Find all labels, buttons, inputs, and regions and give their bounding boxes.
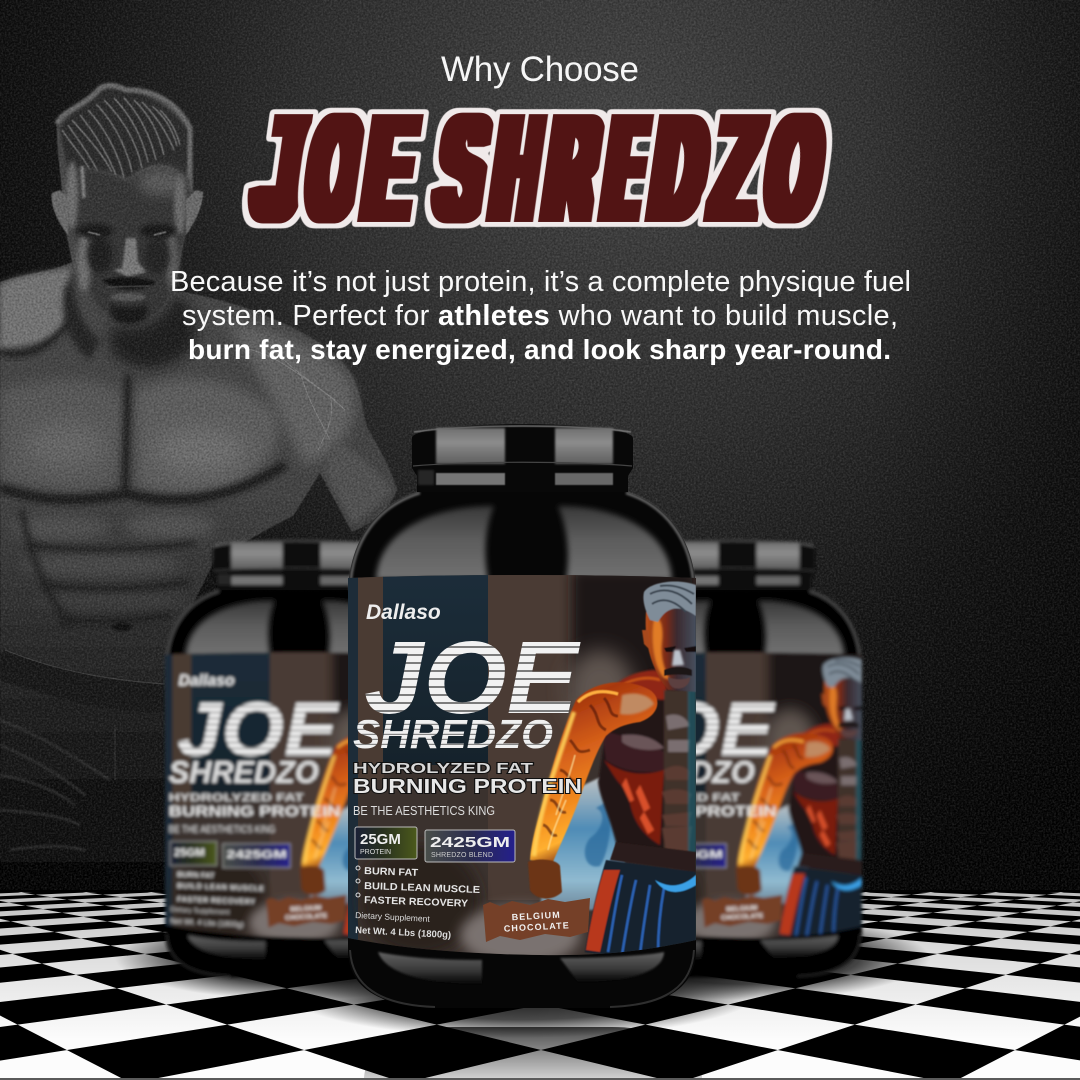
title: JOE SHREDZO: O xyxy=(759,85,831,251)
product jar: left, blurred: 2425GM xyxy=(226,849,286,861)
label: brand: Dallaso xyxy=(366,601,441,624)
heading: Why Choose: Why Choose xyxy=(441,50,639,89)
badge: 2425GM blend xyxy=(425,830,515,862)
product jar: left, blurred: JOE xyxy=(177,687,340,773)
title: JOE SHREDZO: O xyxy=(300,85,370,251)
label: JOE wordmark: JOE xyxy=(364,620,581,735)
badge: 25GM protein: 25GM xyxy=(360,831,401,848)
product jar: right, blurred: BELGIUM xyxy=(726,905,758,913)
text block: why it matters: burn fat, stay energized, and look sharp year-round. xyxy=(188,334,891,365)
label: product name xyxy=(353,760,582,798)
product jar: right, blurred: BURNING PROTEIN xyxy=(605,803,776,820)
label: net weight: Net Wt. 4 Lbs (1800g) xyxy=(355,925,451,941)
product jar: left, blurred: SHREDZO xyxy=(169,754,319,789)
label: product name: HYDROLYZED FAT xyxy=(353,760,533,777)
product jar: right, blurred xyxy=(601,539,862,977)
product jar: right, blurred: CHOCOLATE xyxy=(721,913,764,922)
badge: 25GM protein xyxy=(355,827,417,859)
label: benefit list: BURN FAT xyxy=(364,866,418,879)
product jar: left, blurred: Dietary Supplement xyxy=(170,906,230,916)
product jar: left, blurred: Dallaso xyxy=(178,673,235,690)
product jar: left, blurred: CHOCOLATE xyxy=(285,913,328,922)
badge: 25GM protein: PROTEIN xyxy=(360,849,391,856)
label: product name: BURNING PROTEIN xyxy=(353,776,582,798)
title: JOE SHREDZO: Z xyxy=(705,85,771,251)
bottom edge strip xyxy=(0,1078,1080,1080)
label: net weight: Dietary Supplement xyxy=(355,910,431,924)
product jar: left, blurred: FASTER RECOVERY xyxy=(177,895,255,906)
label: flavour: BELGIUM xyxy=(511,910,560,922)
title: JOE SHREDZO: S xyxy=(429,85,498,251)
product jar: left, blurred: Net Wt. 4 Lbs (1800g) xyxy=(170,916,244,929)
title: JOE SHREDZO: J xyxy=(247,85,315,251)
title: JOE SHREDZO: D xyxy=(644,85,716,251)
product jar: right, blurred: SHREDZO xyxy=(605,754,755,789)
title: JOE SHREDZO: R xyxy=(538,85,609,251)
athlete chest and shoulders xyxy=(0,268,392,525)
jar reflection on the floor xyxy=(364,1027,702,1078)
product jar: right, blurred: 2425GM xyxy=(662,849,722,861)
product jar: left, blurred: BE THE AESTHETICS KING xyxy=(169,825,275,836)
product jar: left, blurred: HYDROLYZED FAT xyxy=(169,792,304,804)
label: tagline: BE THE AESTHETICS KING xyxy=(353,803,495,818)
title: JOE SHREDZO xyxy=(247,85,831,251)
text block: why it matters: Because it’s not just protein, it’s a complete physique fuel xyxy=(170,266,911,298)
badge: 2425GM blend: SHREDZO BLEND xyxy=(431,852,493,859)
product jar: left, blurred: BUILD LEAN MUSCLE xyxy=(177,881,264,893)
athlete abs and waistband xyxy=(0,510,215,850)
label: benefit list: FASTER RECOVERY xyxy=(364,895,469,910)
product jar: left, blurred: BURN FAT xyxy=(177,870,215,880)
label: benefit list: BUILD LEAN MUSCLE xyxy=(364,881,481,896)
text block: why it matters: system. Perfect for athletes who want to build muscle, xyxy=(182,300,898,332)
product jar: right, blurred: HYDROLYZED FAT xyxy=(605,792,740,804)
product jar: right, blurred: JOE xyxy=(613,687,776,773)
athlete face xyxy=(52,161,203,325)
product jar: left, blurred xyxy=(165,539,426,977)
product jar: centre xyxy=(348,424,696,1008)
text block: why it matters xyxy=(170,266,911,365)
product jar: left, blurred: BELGIUM xyxy=(290,905,322,913)
label: flavour: CHOCOLATE xyxy=(504,920,569,934)
title: JOE SHREDZO: E xyxy=(357,85,424,251)
title: JOE SHREDZO: H xyxy=(485,85,555,251)
label: net weight xyxy=(355,910,451,941)
athlete hair xyxy=(57,85,190,190)
checkerboard floor xyxy=(0,892,1080,1078)
product jar: left, blurred: 25GM xyxy=(174,847,205,859)
badge: 2425GM blend: 2425GM xyxy=(430,834,510,851)
label: benefit list xyxy=(356,866,481,910)
product jar: left, blurred: BURNING PROTEIN xyxy=(169,803,340,820)
image: greyscale muscular athlete behind the jars xyxy=(0,85,397,890)
label: SHREDZO wordmark: SHREDZO xyxy=(353,711,553,757)
title: JOE SHREDZO: E xyxy=(597,85,659,251)
label: flavour xyxy=(503,909,569,934)
